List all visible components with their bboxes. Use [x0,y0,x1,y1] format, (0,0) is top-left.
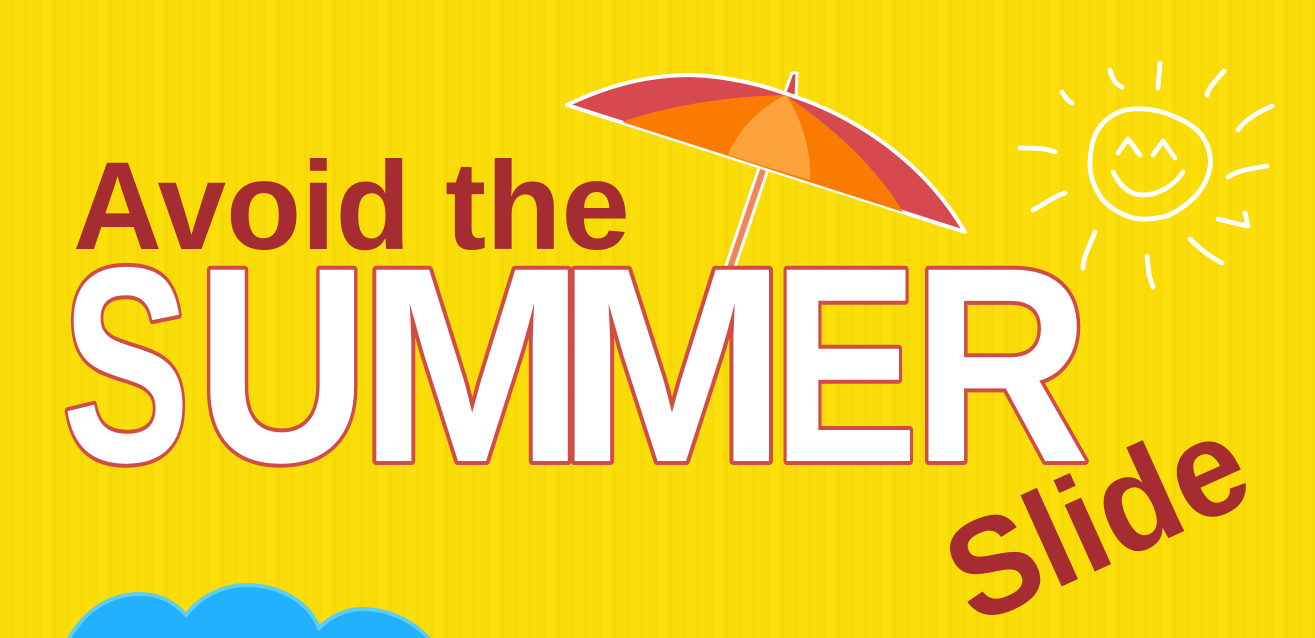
title: Avoid the: Avoid the [73,137,630,276]
title: SUMMER: E [772,210,918,521]
icon: blue cloud [68,585,430,638]
icon: smiling sun [1020,63,1272,287]
title: SUMMER: R [912,209,1090,520]
title: SUMMER [62,209,1090,521]
title: SUMMER: U [196,209,369,520]
title: SUMMER: M [358,210,586,520]
title: SUMMER: M [556,209,788,520]
title: SUMMER: S [62,210,190,520]
icon: beach umbrella [567,73,965,268]
